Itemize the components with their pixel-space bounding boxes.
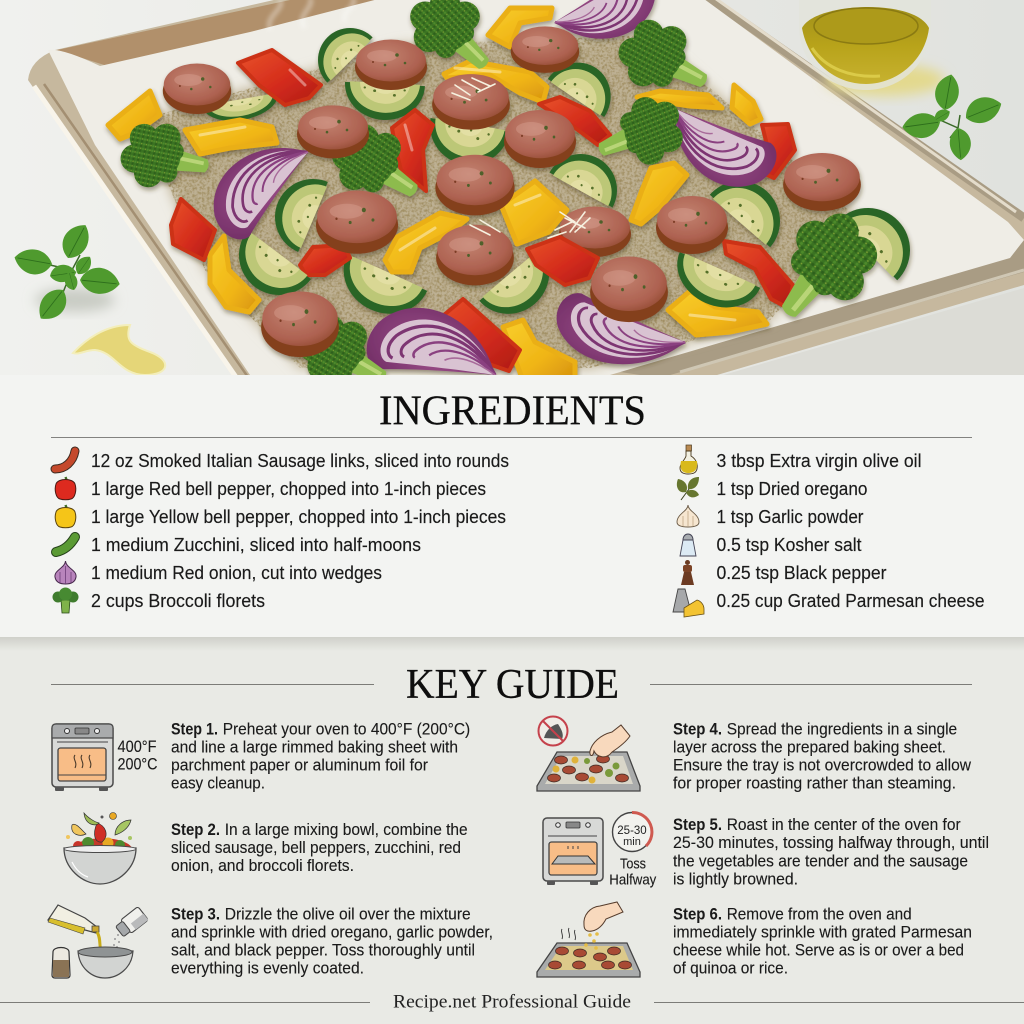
red bell pepper pieces <box>171 50 795 371</box>
ingredient: kosher salt: 0.5 tsp Kosher salt <box>716 535 862 555</box>
icon: oven with timer and toss reminder: min <box>623 836 641 848</box>
step 6 <box>537 902 972 978</box>
text: step 3: and sprinkle with dried oregano, garlic powder, <box>171 922 493 941</box>
hero photo: sheet pan with roasted sausage and vegetables <box>0 0 1024 415</box>
text: step 6: Step 6. <box>673 904 722 923</box>
text: step 1: and line a large rimmed baking sheet with <box>171 737 458 756</box>
text: step 4: Ensure the tray is not overcrowded to allow <box>673 755 972 774</box>
step 2 <box>64 812 468 884</box>
text: step 4: for proper roasting rather than steaming. <box>673 773 956 792</box>
icon: sausage <box>55 451 75 469</box>
zucchini in foreground <box>237 233 762 308</box>
icon: pepper mill <box>681 560 694 585</box>
pepper highlights <box>200 68 735 335</box>
icon: zucchini <box>56 537 75 552</box>
icon: salt shaker <box>680 534 696 556</box>
oregano sprig left <box>14 225 120 319</box>
icon: red bell pepper <box>55 477 76 500</box>
ingredient: red onion: 1 medium Red onion, cut into wedges <box>91 563 382 583</box>
text: step 6: of quinoa or rice. <box>673 958 788 978</box>
glass of olive oil <box>799 0 945 96</box>
oily crumb area on parchment <box>140 35 860 368</box>
text: step 1 <box>171 719 470 792</box>
text: step 2: In a large mixing bowl, combine the <box>225 820 468 839</box>
text: step 1: Step 1. <box>171 719 218 738</box>
text: step 4: Step 4. <box>673 719 722 738</box>
icon: broccoli <box>52 588 78 613</box>
footer: Recipe.net Professional Guide <box>393 992 631 1013</box>
icon: mixing bowl with tossed vegetables <box>64 812 136 884</box>
step 1 <box>52 719 470 792</box>
text: step 3 <box>171 904 493 978</box>
text: step 3: everything is evenly coated. <box>171 958 364 978</box>
text: step 2: sliced sausage, bell peppers, zucchini, red <box>171 838 461 857</box>
icon: pouring oil and seasoning into bowl <box>48 905 148 978</box>
icon: red onion <box>55 561 76 584</box>
ingredient: sausage: 12 oz Smoked Italian Sausage links, sliced into rounds <box>91 451 509 471</box>
text: step 6 <box>673 904 972 978</box>
ingredient: yellow bell pepper: 1 large Yellow bell pepper, chopped into 1-inch pieces <box>91 507 506 527</box>
icon: oven with temperature: 400°F <box>118 737 156 756</box>
olive oil puddle <box>73 325 165 375</box>
text: step 4: Spread the ingredients in a single <box>727 719 957 738</box>
icon: garlic <box>677 505 699 527</box>
icon: oven with timer and toss reminder <box>543 812 657 888</box>
text: step 5: Step 5. <box>673 815 722 834</box>
grated parmesan <box>452 78 590 238</box>
heading underline <box>51 437 972 438</box>
marble countertop background <box>0 0 1024 375</box>
yellow bell pepper pieces <box>108 8 767 378</box>
text: step 3: salt, and black pepper. Toss thoroughly until <box>171 940 475 960</box>
icon: oven with timer and toss reminder: Halfway <box>609 872 657 888</box>
icon: oven with timer and toss reminder: 25-30 <box>617 825 647 837</box>
icon: spreading ingredients on tray, no overcrowding <box>537 716 640 791</box>
text: step 4 <box>673 719 972 792</box>
ingredient: olive oil: 3 tbsp Extra virgin olive oil <box>716 451 922 471</box>
text: step 5: 25-30 minutes, tossing halfway through, until <box>673 833 989 852</box>
text: step 1: parchment paper or aluminum foil for <box>171 755 428 774</box>
sausage slices <box>163 26 861 357</box>
icon: oregano <box>677 477 699 500</box>
oregano sprig right <box>901 72 1005 161</box>
icon: yellow bell pepper <box>55 505 76 528</box>
left ingredient list <box>52 451 509 613</box>
roasted vegetables and sausage <box>104 0 914 375</box>
icon: sprinkling parmesan over hot tray <box>537 902 640 977</box>
text: step 2: onion, and broccoli florets. <box>171 856 354 875</box>
ingredient: zucchini: 1 medium Zucchini, sliced into half-moons <box>91 535 421 555</box>
ingredient: garlic powder: 1 tsp Garlic powder <box>716 507 864 527</box>
right ingredient list <box>673 445 984 617</box>
red onion wedges <box>195 0 785 415</box>
icon: olive oil bottle <box>680 445 697 474</box>
text: step 3: Drizzle the olive oil over the mixture <box>225 904 471 923</box>
parchment paper <box>48 0 1024 375</box>
text: step 6: immediately sprinkle with grated Parmesan <box>673 922 972 941</box>
ingredient: broccoli: 2 cups Broccoli florets <box>91 591 265 611</box>
baking tray <box>28 0 1024 380</box>
step 4 <box>537 716 972 792</box>
panel: key guide <box>0 637 1024 1024</box>
text: step 1: Preheat your oven to 400°F (200°C) <box>223 719 470 738</box>
broccoli florets <box>116 0 894 409</box>
text: step 5: Roast in the center of the oven for <box>727 815 961 834</box>
step 3 <box>48 904 493 978</box>
text: step 4: layer across the prepared baking sheet. <box>673 737 946 756</box>
icon: oven with timer and toss reminder: Toss <box>620 856 646 872</box>
heading: key guide: KEY GUIDE <box>406 661 619 708</box>
ingredient: black pepper: 0.25 tsp Black pepper <box>716 563 886 583</box>
ingredient: red bell pepper: 1 large Red bell pepper, chopped into 1-inch pieces <box>91 479 486 499</box>
text: step 5: the vegetables are tender and the sausage <box>673 851 968 870</box>
text: step 6: cheese while hot. Serve as is or over a bed <box>673 940 964 960</box>
ingredient: oregano: 1 tsp Dried oregano <box>716 479 868 499</box>
icon: oven with temperature: 200°C <box>118 754 158 774</box>
partly hidden sausage slice <box>559 206 631 257</box>
text: step 6: Remove from the oven and <box>727 904 912 923</box>
ingredient: parmesan: 0.25 cup Grated Parmesan cheese <box>716 591 984 611</box>
rising steam <box>269 0 354 30</box>
panel: ingredients <box>0 375 1024 637</box>
icon: grater and parmesan <box>673 589 704 617</box>
text: step 5: is lightly browned. <box>673 869 798 888</box>
zucchini half-moons <box>202 15 927 330</box>
heading: ingredients: INGREDIENTS <box>379 388 646 434</box>
step 5 <box>543 812 989 888</box>
text: step 1: easy cleanup. <box>171 773 265 792</box>
counter below tray <box>724 290 1022 375</box>
text: step 5 <box>673 815 989 888</box>
icon: oven with temperature <box>52 724 158 791</box>
text: step 2: Step 2. <box>171 820 220 839</box>
text: step 2 <box>171 820 468 875</box>
text: step 3: Step 3. <box>171 904 220 923</box>
